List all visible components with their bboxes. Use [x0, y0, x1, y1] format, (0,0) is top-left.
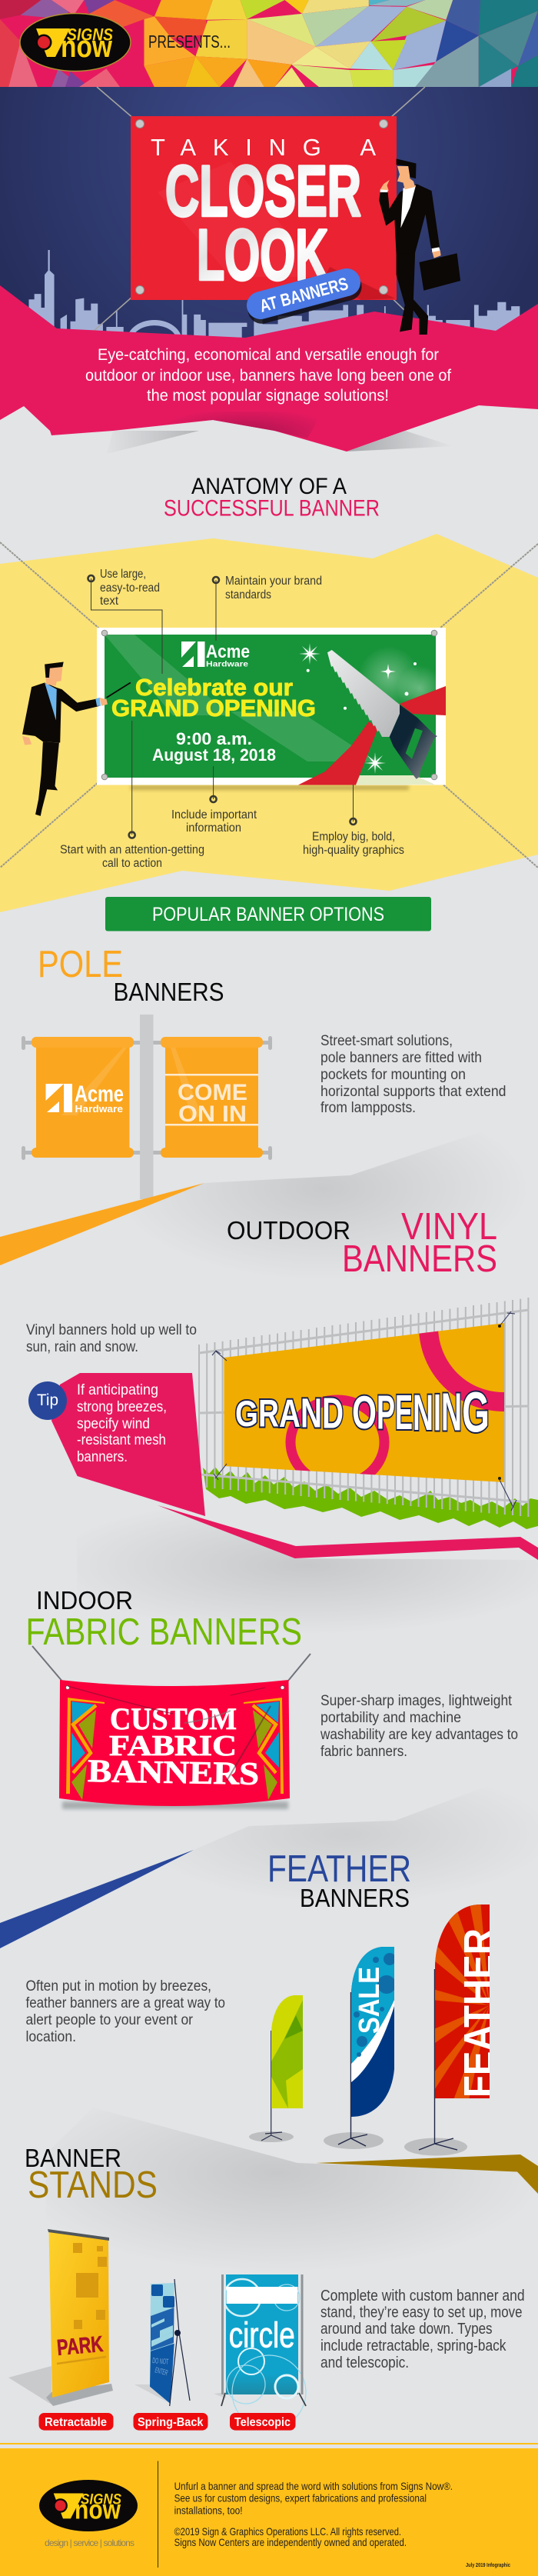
telescopic stand: circle [229, 2315, 295, 2355]
ropes [92, 87, 425, 332]
annotation: large text: Use large, [100, 568, 146, 581]
acme logo [46, 1081, 124, 1115]
label: telescopic [230, 2413, 295, 2431]
acme logo: Hardware [75, 1103, 123, 1115]
left ornament [66, 1698, 105, 1800]
text: pole banners: pole banners are fitted with [320, 1050, 482, 1066]
right banner [161, 1037, 263, 1158]
acme logo: Acme [206, 642, 250, 662]
spring-back stand [134, 2279, 190, 2406]
text: pole banners: from lampposts. [320, 1100, 416, 1116]
heading: indoor fabric banners [26, 1586, 302, 1653]
footer message: See us for custom designs, expert fabrications and professional [174, 2492, 427, 2504]
callout pill: at banners [244, 265, 365, 327]
right ornament [244, 1698, 284, 1800]
heading: outdoor vinyl banners: BANNERS [342, 1238, 497, 1280]
text: fabric banners: fabric banners. [320, 1744, 407, 1760]
anatomy heading [164, 474, 380, 522]
pink hero wave [0, 285, 538, 452]
banner [224, 1323, 504, 1482]
annotation: brand standards [225, 575, 322, 602]
annotation: graphics: high-quality graphics [303, 844, 404, 857]
callout lines and rings [88, 575, 357, 838]
text: feather banners: location. [26, 2029, 76, 2045]
heading: feather banners: BANNERS [300, 1884, 410, 1912]
footer date: July 2019 Infographic [466, 2561, 510, 2568]
acme logo: Acme [75, 1081, 124, 1107]
tip callout: strong breezes, [77, 1399, 167, 1415]
text: banner stands: include retractable, spring-back [320, 2338, 506, 2354]
annotation: important information: information [186, 821, 241, 835]
heading: pole banners [38, 944, 224, 1006]
annotation: important information [171, 808, 257, 835]
wave shadows [107, 431, 453, 454]
banner headline: GRAND OPENING [111, 695, 316, 721]
heading: banner stands [25, 2144, 158, 2206]
heading: feather banners [267, 1848, 411, 1912]
banner headline: Celebrate our [135, 674, 293, 701]
text: pole banners [320, 1033, 506, 1116]
text: vinyl banners [26, 1322, 197, 1355]
annotation: graphics: Employ big, bold, [312, 831, 395, 843]
green feather flag [249, 1995, 303, 2142]
footer panel [0, 2443, 538, 2576]
annotation: call to action: Start with an attention-getting [60, 843, 204, 856]
annotation: brand standards: Maintain your brand [225, 575, 322, 588]
anatomy heading: ANATOMY OF A [191, 474, 347, 499]
heading: indoor fabric banners: INDOOR [36, 1586, 133, 1615]
banner lettering: R [258, 1392, 279, 1435]
heading: banner stands: STANDS [28, 2164, 158, 2206]
shadow and orange swoosh [0, 1131, 530, 1308]
banner lettering: G [462, 1380, 490, 1445]
footer tagline: design | service | solutions [45, 2538, 134, 2548]
saw [327, 650, 437, 779]
ropes [0, 542, 538, 868]
banner lettering: A [279, 1391, 301, 1435]
pole [140, 1015, 154, 1199]
annotation: large text: text [100, 595, 119, 608]
label: spring-back: Spring-Back [138, 2416, 204, 2429]
banner lettering: N [301, 1391, 322, 1437]
yellow anatomy backdrop [0, 534, 538, 912]
tip callout: -resistant mesh [77, 1432, 166, 1448]
date text: 9:00 a.m. [176, 729, 252, 748]
banner lettering: E [395, 1385, 413, 1440]
heading: feather banners: FEATHER [267, 1848, 411, 1890]
pickets [199, 1298, 528, 1517]
right banner: ON IN [178, 1101, 247, 1127]
shadow and blue swoosh [0, 1777, 538, 1948]
banner lettering [235, 1380, 490, 1445]
acme logo: Hardware [206, 660, 248, 669]
pole banner illustration [22, 1015, 272, 1199]
annotation: important information: Include important [171, 808, 257, 821]
gold swoosh [316, 2154, 538, 2194]
fabric banner illustration [32, 1646, 311, 1809]
text: vinyl banners: sun, rain and snow. [26, 1339, 138, 1355]
annotation: graphics [303, 831, 404, 857]
logo: Signs Now header: SIGNS [67, 25, 113, 45]
banner lettering: I [433, 1383, 441, 1441]
blue sale feather flag: SALE [354, 1967, 386, 2034]
fence with vinyl banner [198, 1298, 538, 1529]
text: feather banners [26, 1978, 225, 2045]
date text [152, 729, 276, 765]
footer legal: ©2019 Sign & Graphics Operations LLC. All rights reserved. [174, 2525, 401, 2538]
heading: outdoor vinyl banners [227, 1206, 497, 1280]
businessman with briefcase [379, 158, 460, 335]
text: banner stands: around and take down. Types [320, 2321, 493, 2338]
header mosaic band [0, 0, 538, 87]
anatomy heading: SUCCESSFUL BANNER [164, 495, 380, 522]
grommets [101, 630, 437, 780]
right banner: COME [178, 1080, 247, 1105]
text: pole banners: Street-smart solutions, [320, 1033, 453, 1049]
label: retractable [38, 2413, 114, 2431]
hero banner: TAKING A [151, 134, 376, 161]
spring-back stand: ENTER [154, 2366, 168, 2378]
tip badge: Tip [37, 1391, 58, 1409]
retractable stand: PARK [56, 2332, 104, 2361]
text: fabric banners: Super-sharp images, lightweight [320, 1693, 513, 1709]
intro text: the most popular signage solutions! [147, 387, 389, 405]
banner lettering: P [377, 1386, 395, 1440]
callout pill: at banners: AT BANNERS [257, 273, 350, 316]
hero banner [92, 87, 425, 332]
red feather flag: FEATHER [456, 1928, 502, 2098]
ribbon [298, 686, 446, 785]
presenter man [22, 662, 131, 816]
text: fabric banners: washability are key advantages to [320, 1727, 518, 1743]
logo: Signs Now header [20, 14, 131, 71]
banner lettering: N [441, 1382, 462, 1442]
sparkles [299, 643, 417, 774]
presents label: PRESENTS... [148, 32, 231, 52]
section button: popular banner options: POPULAR BANNER OPTIONS [152, 904, 384, 925]
banner lettering: O [352, 1387, 377, 1438]
acme logo [181, 642, 250, 669]
annotation: large text: easy-to-read [100, 582, 160, 595]
annotation: large text [100, 568, 160, 608]
retractable stand [8, 2229, 113, 2406]
tip callout: banners. [77, 1449, 128, 1465]
section button: popular banner options [105, 897, 431, 931]
footer message: Unfurl a banner and spread the word with solutions from Signs Now®. [174, 2480, 453, 2492]
heading: indoor fabric banners: FABRIC BANNERS [26, 1611, 302, 1653]
grass [203, 1467, 538, 1529]
banner lettering: G [235, 1393, 258, 1434]
spring-back stand: DO NOT [152, 2357, 169, 2367]
date text: August 18, 2018 [152, 745, 276, 765]
lower shadows and pink swoosh [77, 1476, 538, 1638]
anatomy banner [0, 542, 538, 868]
intro text: outdoor or indoor use, banners have long been one of [85, 367, 451, 385]
footer message: installations, too! [174, 2504, 243, 2517]
label: retractable: Retractable [45, 2416, 107, 2429]
text: banner stands: and telescopic. [320, 2354, 409, 2371]
grommets [135, 120, 387, 294]
tip badge [28, 1381, 67, 1420]
text: pole banners: horizontal supports that extend [320, 1084, 506, 1100]
footer legal [174, 2525, 407, 2548]
footer logo [39, 2480, 138, 2531]
fabric lettering: BANNERS [88, 1754, 259, 1792]
shadow under feather flags [46, 2108, 538, 2300]
skyline [28, 250, 520, 341]
banner lettering: N [413, 1384, 433, 1441]
heading: outdoor vinyl banners: OUTDOOR [227, 1216, 350, 1245]
text: feather banners: alert people to your event or [26, 2012, 194, 2028]
tip callout [28, 1373, 205, 1516]
hero banner: LOOK [197, 214, 328, 295]
fabric lettering: CUSTOM [110, 1701, 237, 1736]
blue sale feather flag [324, 1947, 396, 2149]
heading: pole banners: BANNERS [114, 978, 224, 1006]
telescopic stand [214, 2274, 306, 2429]
intro text [85, 346, 451, 405]
red feather flag [404, 1905, 490, 2155]
heading: outdoor vinyl banners: VINYL [401, 1206, 497, 1248]
navy hero panel [0, 87, 538, 379]
footer legal: Signs Now Centers are independently owned and operated. [174, 2536, 407, 2548]
left banner [32, 1037, 134, 1158]
text: fabric banners [320, 1693, 518, 1760]
intro text: Eye-catching, economical and versatile enough for [98, 346, 439, 364]
banner headline [111, 674, 316, 721]
logo: Signs Now header: now [61, 30, 113, 64]
text: banner stands [320, 2288, 525, 2371]
footer logo: SIGNS [81, 2491, 121, 2508]
ties [212, 1311, 516, 1511]
tip callout: specify wind [77, 1416, 150, 1432]
fabric lettering [88, 1701, 259, 1792]
annotation: call to action: call to action [102, 857, 162, 870]
hero banner: CLOSER [165, 151, 361, 231]
text: feather banners: Often put in motion by breezes, [26, 1978, 211, 1994]
heading: banner stands: BANNER [25, 2144, 121, 2172]
text: fabric banners: portability and machine [320, 1710, 461, 1726]
rails [199, 1310, 529, 1502]
footer logo: now [75, 2494, 121, 2524]
text: vinyl banners: Vinyl banners hold up well to [26, 1322, 197, 1338]
heading: pole banners: POLE [38, 944, 123, 985]
fabric lettering: FABRIC [109, 1730, 237, 1762]
annotation: brand standards: standards [225, 588, 271, 602]
annotation: call to action [60, 843, 204, 870]
wrinkles [68, 1686, 271, 1781]
footer message [174, 2480, 453, 2517]
text: feather banners: feather banners are a great way to [26, 1995, 225, 2011]
text: pole banners: pockets for mounting on [320, 1067, 466, 1083]
tip callout: If anticipating [77, 1382, 158, 1398]
label: telescopic: Telescopic [234, 2416, 291, 2429]
arms [22, 1036, 272, 1160]
banner lettering: D [322, 1389, 344, 1438]
